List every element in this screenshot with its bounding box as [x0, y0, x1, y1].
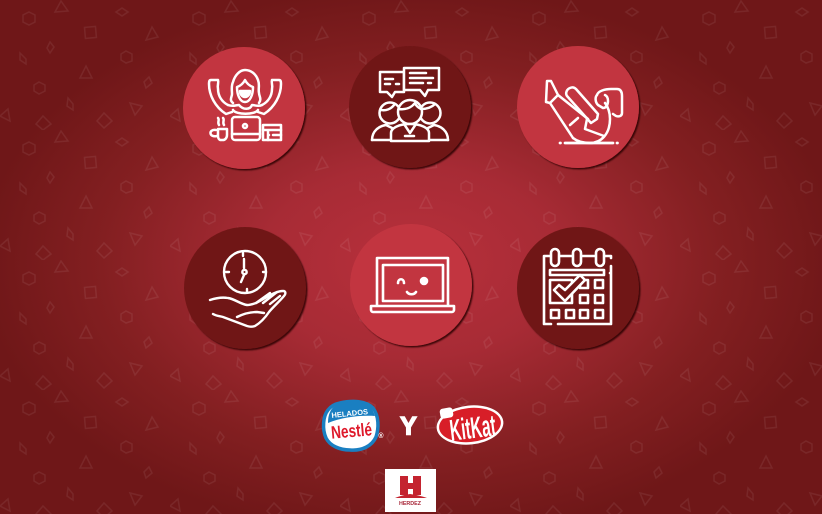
logo text: registered mark: ®	[378, 432, 384, 440]
icon: woman with laptop	[209, 70, 281, 140]
logo: Grupo Herdez	[385, 469, 436, 512]
logo: Helados Nestlé	[324, 401, 384, 450]
circle: smiling laptop	[350, 224, 472, 346]
circle: calendar	[517, 227, 639, 349]
icon: hand holding a clock	[210, 251, 285, 327]
logo badge: Nestlé	[439, 407, 454, 419]
circle: team conversation	[349, 46, 471, 168]
circle: yoga posture	[517, 46, 639, 168]
circle: time in hand	[184, 227, 306, 349]
icon: laptop with smiling face	[371, 258, 454, 312]
logo text: Nestlé: Nestlé	[330, 419, 373, 443]
logo: KitKat	[435, 402, 505, 448]
circle: woman working at laptop	[183, 47, 305, 169]
logo text: Helados: HELADOS	[331, 407, 368, 420]
icon: calendar with check mark	[544, 249, 611, 324]
icon: yoga boat pose	[546, 81, 622, 143]
connector letter Y: Y	[400, 412, 417, 440]
logo text: KitKat wordmark: KitKat	[448, 409, 498, 448]
logo text: Grupo Herdez: HERDEZ	[399, 501, 421, 507]
icon: group of people with speech bubbles	[372, 68, 448, 141]
